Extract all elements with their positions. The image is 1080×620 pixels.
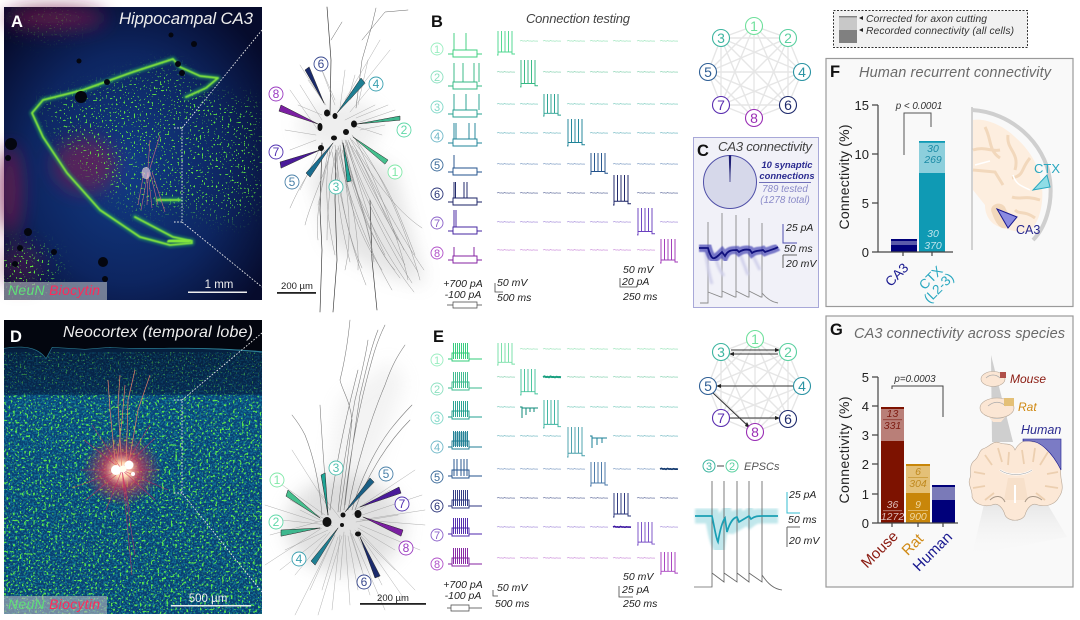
heading: Connection testing: Connection testing xyxy=(526,11,631,26)
zoom dashed lines panel D xyxy=(174,333,262,592)
mouse bar: 1272 xyxy=(881,511,904,523)
pie chart xyxy=(704,156,756,208)
CTX bar xyxy=(919,141,945,252)
pie annotation: 789 tested xyxy=(762,184,808,195)
rat bar: 900 xyxy=(909,511,927,523)
cell labels: 8 xyxy=(434,248,440,260)
scale bar: 50 mV, 500 ms: 50 mV xyxy=(497,277,528,289)
rat bar: 304 xyxy=(909,478,927,490)
cell labels xyxy=(431,354,443,571)
mouse bar: 331 xyxy=(884,420,901,432)
panel label A: A xyxy=(11,13,23,31)
panel label G: G xyxy=(830,321,843,339)
scale bar: 50 mV, 20 pA, 250 ms: 250 ms xyxy=(622,291,658,303)
cortical surface edge xyxy=(4,347,262,358)
air bubbles xyxy=(5,32,197,282)
CA3 bar xyxy=(891,239,917,252)
CTX bar: 370 xyxy=(924,240,942,252)
scale bar 200 µm: 200 µm xyxy=(281,281,313,292)
connectivity ring diagram E: 6 xyxy=(784,411,792,427)
brain size comparison xyxy=(969,355,1067,555)
scale bar: 50 mV, 500 ms xyxy=(493,582,530,610)
rat bar: 9 xyxy=(915,499,921,511)
label background xyxy=(4,282,107,300)
stimulus protocol: -100 pA xyxy=(445,289,481,301)
y tick labels: 5 xyxy=(862,196,869,211)
y tick labels: 15 xyxy=(855,98,869,113)
mouse label: Mouse xyxy=(1010,372,1046,386)
panel A neuron reconstruction: 3 xyxy=(333,180,340,194)
rat bar xyxy=(906,464,930,523)
panel E: neocortex connection traces xyxy=(431,328,678,611)
panel label B: B xyxy=(431,13,443,31)
scale bars: 25 pA xyxy=(788,489,816,501)
label background xyxy=(4,596,107,614)
panel D neuron reconstruction: 4 xyxy=(296,552,303,566)
connectivity ring diagram B: 7 xyxy=(717,97,725,113)
action potential and EPSC traces xyxy=(699,213,778,303)
significance bracket: p < 0.0001 xyxy=(895,101,942,112)
scale bar: 50 mV, 25 pA, 250 ms xyxy=(619,571,658,610)
scale bar 500 µm xyxy=(171,593,251,606)
panel D neuron reconstruction: 3 xyxy=(333,461,340,475)
pipette numbers xyxy=(269,57,411,194)
cell labels: 1 xyxy=(434,355,440,367)
scale bar: 50 mV, 25 pA, 250 ms: 25 pA xyxy=(621,584,649,596)
connectivity ring diagram B: 2 xyxy=(784,30,792,46)
connectivity ring diagram E: 7 xyxy=(717,410,725,426)
panel label F: F xyxy=(830,63,840,81)
scale bars: 20 mV xyxy=(785,258,817,270)
scale bar: 50 mV, 25 pA, 250 ms: 50 mV xyxy=(623,571,654,583)
bar chart xyxy=(836,370,958,575)
stain legend: NeuN Biocytin xyxy=(8,282,100,298)
human label: Human xyxy=(1021,423,1061,437)
connectivity ring diagram B: 1 xyxy=(750,18,758,34)
cell labels: 3 xyxy=(434,102,440,114)
y tick labels: 5 xyxy=(862,370,869,385)
rat brain xyxy=(980,398,1014,422)
cell labels: 2 xyxy=(434,72,440,84)
traces xyxy=(694,481,782,590)
human cortex highlight xyxy=(1023,439,1061,470)
panel A neuron reconstruction: 1 xyxy=(392,165,399,179)
cell labels: 6 xyxy=(434,189,440,201)
legend: Recorded connectivity (all cells) xyxy=(866,26,1014,37)
scale bar: 50 mV, 500 ms: 50 mV xyxy=(497,582,528,594)
panel A neuron reconstruction: 2 xyxy=(401,123,408,137)
y axis title: Connectivity (%) xyxy=(836,124,852,230)
CTX bar: 30 xyxy=(927,143,939,155)
panel C: CA3 connectivity xyxy=(694,138,818,308)
scale bar: 50 mV, 500 ms: 500 ms xyxy=(497,292,532,304)
panel D neuron reconstruction: 7 xyxy=(399,497,406,511)
panel G: CA3 connectivity across species xyxy=(826,316,1073,587)
bar chart xyxy=(836,98,957,306)
spike trains on the diagonal xyxy=(497,343,678,574)
stain legend: NeuN Biocytin xyxy=(8,596,100,612)
y tick labels: 3 xyxy=(862,428,869,443)
panel label D: D xyxy=(10,328,22,346)
panel A: hippocampal CA3 micrograph xyxy=(0,6,262,300)
panel D neuron reconstruction xyxy=(265,320,426,615)
cell labels xyxy=(431,43,443,260)
connectivity ring diagram E xyxy=(700,330,810,440)
panel A neuron reconstruction: 4 xyxy=(373,77,380,91)
scale bar 200 µm xyxy=(360,593,426,605)
panel D neuron reconstruction: 1 xyxy=(274,473,281,487)
significance bracket xyxy=(895,101,942,155)
connectivity ring diagram B: 5 xyxy=(704,64,712,80)
EPSC title: 2 xyxy=(729,461,735,473)
postsynaptic recordings xyxy=(497,348,678,558)
spike trains on the diagonal xyxy=(497,31,678,263)
y tick labels: 10 xyxy=(855,147,869,162)
current-clamp step responses xyxy=(448,343,482,566)
species labels: Human xyxy=(910,529,956,575)
EPSC title: 3 xyxy=(706,461,712,473)
recording pipettes xyxy=(279,67,400,182)
CA3 label: CA3 xyxy=(1016,223,1040,237)
panel A neuron reconstruction: 7 xyxy=(273,145,280,159)
postsynaptic recordings xyxy=(497,40,678,250)
biocytin filled neurons xyxy=(138,135,165,212)
mouse bar: 13 xyxy=(887,408,898,420)
scale bar: 50 mV, 500 ms xyxy=(495,277,532,304)
cell labels: 1 xyxy=(434,44,440,56)
y tick labels: 0 xyxy=(862,516,869,531)
CTX bar: 30 xyxy=(927,228,939,240)
heading: Human recurrent connectivity xyxy=(859,65,1052,81)
y tick labels: 4 xyxy=(862,399,869,414)
heading: Neocortex (temporal lobe): Neocortex (temporal lobe) xyxy=(63,324,253,341)
cell labels: 4 xyxy=(434,131,440,143)
cell labels: 6 xyxy=(434,501,440,513)
connectivity ring diagram B: 8 xyxy=(750,110,758,126)
stimulus protocol xyxy=(443,278,483,308)
CA3 neuron marker xyxy=(997,209,1017,228)
connectivity ring diagram E: 2 xyxy=(784,344,792,360)
brain section with recording sites xyxy=(972,107,1060,250)
axes xyxy=(872,377,958,527)
connectivity ring diagram E: 8 xyxy=(751,424,759,440)
connectivity ring diagram E: 4 xyxy=(798,378,806,394)
cell labels: 5 xyxy=(434,472,440,484)
magenta tissue regions xyxy=(0,6,117,287)
neuron somata cluster xyxy=(318,110,357,151)
pie annotation: (1278 total) xyxy=(760,195,810,206)
panel D neuron reconstruction: 5 xyxy=(383,467,390,481)
connectivity ring diagram B: 6 xyxy=(784,97,792,113)
pipette numbers xyxy=(269,461,413,589)
EPSC title xyxy=(703,460,780,473)
pie annotation: connections xyxy=(759,170,815,181)
cell labels: 4 xyxy=(434,442,440,454)
species labels xyxy=(858,528,956,575)
connected pair traces xyxy=(520,376,678,527)
recording pipettes xyxy=(281,473,403,578)
panel D neuron reconstruction: 6 xyxy=(361,575,368,589)
axes xyxy=(872,105,953,256)
projection cone xyxy=(972,355,1067,555)
connectivity ring diagram E: 1 xyxy=(751,331,759,347)
stimulus protocol: +700 pA xyxy=(443,278,483,290)
y tick labels: 1 xyxy=(862,487,869,502)
scale bar: 50 mV, 25 pA, 250 ms: 250 ms xyxy=(622,598,658,610)
cell labels: 7 xyxy=(434,530,440,542)
mouse bar xyxy=(881,407,904,523)
legend: Corrected for axon cutting xyxy=(866,14,987,25)
y axis title: Connectivity (%) xyxy=(836,396,852,504)
panel A neuron reconstruction: 6 xyxy=(318,57,325,71)
CTX bar: 269 xyxy=(923,154,942,166)
panel D neuron reconstruction: 8 xyxy=(403,541,410,555)
heading: CA3 connectivity across species xyxy=(854,326,1065,342)
zoom dashed lines panel A xyxy=(174,30,262,287)
scale bars xyxy=(783,222,817,270)
stimulus protocol xyxy=(443,579,483,611)
connectivity ring diagram B xyxy=(700,18,810,126)
legend xyxy=(834,10,1028,48)
scale bar 500 µm: 500 µm xyxy=(189,593,227,605)
current-clamp step responses xyxy=(448,33,482,263)
scale bar 200 µm: 200 µm xyxy=(377,593,409,604)
panel A neuron reconstruction: 8 xyxy=(273,87,280,101)
scale bars: 20 mV xyxy=(788,535,820,547)
connectivity ring diagram B: 4 xyxy=(798,64,806,80)
y tick labels xyxy=(855,98,869,260)
panel D: neocortex micrograph xyxy=(4,320,262,614)
green NeuN speckle xyxy=(4,7,262,300)
panel label E: E xyxy=(433,328,444,346)
cell speckle layers xyxy=(4,352,262,614)
cell labels: 3 xyxy=(434,413,440,425)
heading: CA3 connectivity: CA3 connectivity xyxy=(718,139,813,154)
panel F: human recurrent connectivity xyxy=(826,58,1073,306)
panel A neuron reconstruction: 5 xyxy=(289,175,296,189)
cell labels: 2 xyxy=(434,384,440,396)
connectivity ring diagram B: 3 xyxy=(717,30,725,46)
black area above the pia xyxy=(4,320,262,358)
human bar xyxy=(932,485,955,523)
scale bars: 50 ms xyxy=(784,243,813,255)
y tick labels: 0 xyxy=(862,245,869,260)
x labels xyxy=(882,260,957,306)
panel B: connection testing traces xyxy=(431,11,678,308)
panel D neuron reconstruction: 2 xyxy=(273,515,280,529)
scale bar 1 mm xyxy=(188,279,247,293)
stimulus protocol: -100 pA xyxy=(445,590,481,602)
scale bars: 25 pA xyxy=(785,222,813,234)
scale bar: 50 mV, 500 ms: 500 ms xyxy=(495,598,530,610)
significance bracket: p=0.0003 xyxy=(893,374,936,385)
CTX neuron marker xyxy=(1033,175,1050,190)
mouse brain xyxy=(981,372,1006,386)
scale bar: 50 mV, 20 pA, 250 ms: 20 pA xyxy=(621,276,649,288)
cell labels: 8 xyxy=(434,559,440,571)
pie annotation xyxy=(759,159,815,206)
CA pyramidal cell band xyxy=(32,59,218,245)
connectivity ring diagram E: 5 xyxy=(704,378,712,394)
neuron somata cluster xyxy=(322,510,362,536)
x labels: (L2-3) xyxy=(921,270,957,306)
scale bar: 50 mV, 20 pA, 250 ms xyxy=(620,264,658,303)
biocytin burst xyxy=(72,370,168,575)
x labels: CTX xyxy=(916,263,946,293)
heading: Hippocampal CA3: Hippocampal CA3 xyxy=(119,9,254,28)
y tick labels xyxy=(862,370,869,531)
cell labels: 5 xyxy=(434,160,440,172)
human brain xyxy=(969,441,1062,520)
scale bar 1 mm: 1 mm xyxy=(205,279,233,291)
species labels: Mouse xyxy=(858,528,902,572)
panel A neuron reconstruction xyxy=(269,7,425,312)
EPSC title: EPSCs xyxy=(744,461,780,473)
cell labels: 7 xyxy=(434,218,440,230)
EPSC example 3 to 2 xyxy=(694,460,820,590)
rat label: Rat xyxy=(1018,400,1037,414)
connectivity ring diagram E: 3 xyxy=(717,344,725,360)
panel label C: C xyxy=(697,142,709,160)
scale bars: 50 ms xyxy=(788,514,817,526)
connection arrows xyxy=(713,348,794,428)
x labels: CA3 xyxy=(882,260,911,289)
CTX label: CTX xyxy=(1034,161,1060,176)
mouse bar: 36 xyxy=(887,499,898,511)
y tick labels: 2 xyxy=(862,457,869,472)
rat bar: 6 xyxy=(915,466,921,478)
scale bar: 50 mV, 20 pA, 250 ms: 50 mV xyxy=(623,264,654,276)
significance bracket xyxy=(892,374,943,417)
stimulus protocol: +700 pA xyxy=(443,579,483,591)
species labels: Rat xyxy=(899,530,928,559)
scale bars xyxy=(787,489,820,547)
pie annotation: 10 synaptic xyxy=(761,159,813,170)
